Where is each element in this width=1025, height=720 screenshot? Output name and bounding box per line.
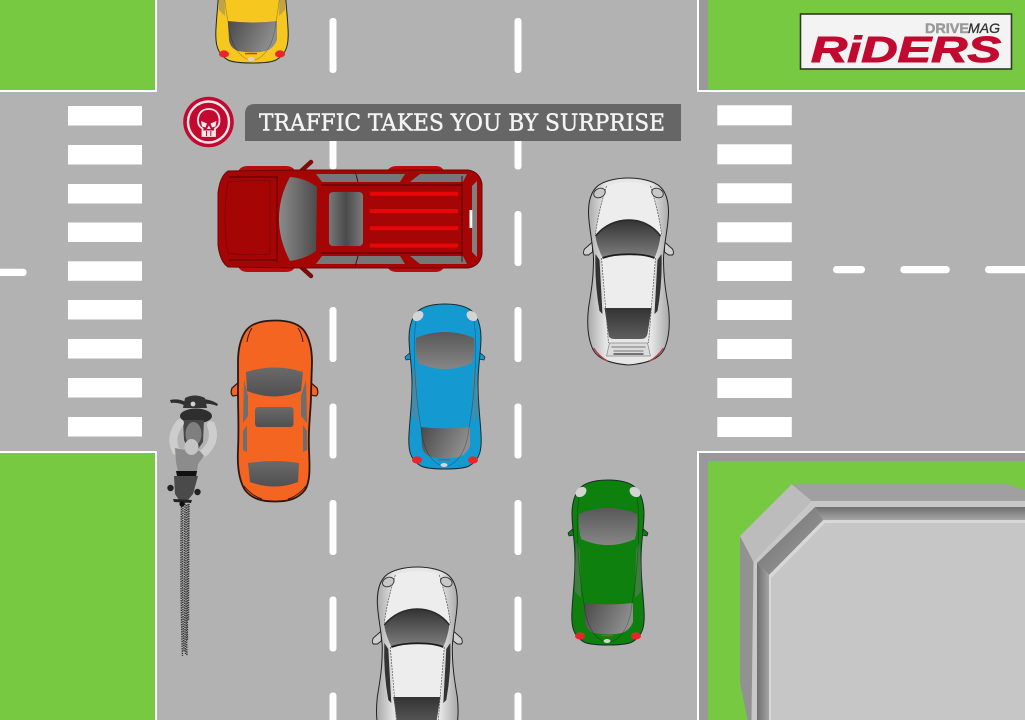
icon: skull <box>198 109 220 136</box>
grass corner: bottom right <box>697 451 1025 720</box>
car: yellow, top <box>212 0 292 63</box>
car: orange sedan <box>231 320 318 502</box>
logo: DriveMag Riders: RiDERS <box>811 29 1001 70</box>
logo: DriveMag Riders: DRIVE <box>925 20 969 36</box>
motorcycle with rider <box>167 396 218 507</box>
car: red SUV <box>218 162 482 276</box>
warning badge: skull <box>183 97 234 147</box>
right crosswalk <box>717 105 792 437</box>
headline banner <box>245 104 681 141</box>
grass corner: bottom left <box>0 451 157 720</box>
grass corner: top left <box>0 0 157 92</box>
logo: DriveMag Riders: MAG <box>968 20 1000 36</box>
grass corner: top right <box>697 0 1025 92</box>
car: silver sports car, bottom <box>372 567 462 720</box>
building roof <box>740 484 1025 720</box>
skid mark <box>181 504 189 656</box>
car: silver sports car, right lane <box>584 178 674 365</box>
car: green <box>568 480 648 645</box>
logo: DriveMag Riders <box>800 14 1012 70</box>
left crosswalk <box>68 106 142 436</box>
car: blue <box>405 304 485 469</box>
headline banner: TRAFFIC TAKES YOU BY SURPRISE <box>259 110 665 136</box>
